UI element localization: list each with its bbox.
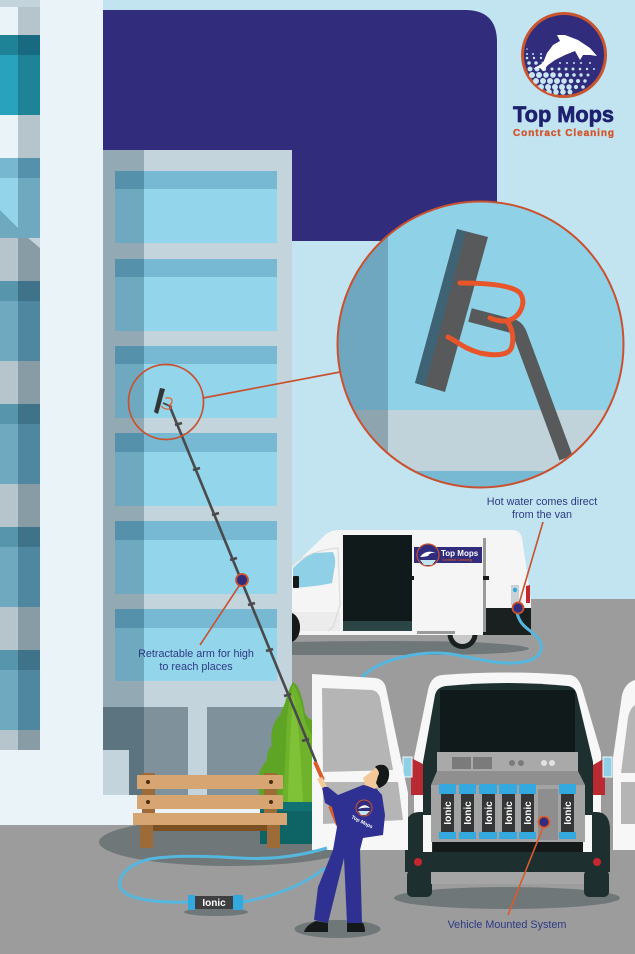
logo wordmark: Top Mops [513,102,614,127]
navy backdrop block [103,10,497,241]
telescopic pole [170,407,338,825]
operator figure [304,765,389,932]
open right van door [613,680,635,850]
label: retractable arm: to reach places [159,661,233,673]
ionic cylinder 1: Ionic [443,801,454,825]
van signage: Top Mops [441,549,479,558]
ionic cylinder 2 [459,784,476,839]
label: vehicle mounted system: Vehicle Mounted System [448,919,566,931]
potted tree [258,682,312,844]
ionic filter: Ionic [202,898,226,909]
side van shadow [292,641,529,655]
Top Mops logo [513,14,614,139]
ionic cylinder 6 [559,784,576,839]
label: hot water: Hot water comes direct [487,496,597,508]
ionic cylinder 3: Ionic [484,801,495,825]
ionic cylinder 1 [439,784,456,839]
ionic cylinder 6: Ionic [563,801,574,825]
left building [0,0,129,825]
open left van door [312,674,408,850]
logo roundel [522,14,606,96]
bench and tree shadow [99,825,333,866]
magnified squeegee circle [330,195,630,495]
van signage: Contract Cleaning [442,558,472,562]
central building [103,150,292,825]
bench [133,773,287,848]
callout: retractable arm [138,574,254,673]
filter shadow [184,908,248,916]
label: retractable arm: Retractable arm for high [138,648,254,660]
ionic cylinder 5: Ionic [523,801,534,825]
small squeegee head [154,388,172,414]
ionic cylinder 2: Ionic [463,801,474,825]
rear van shadow [394,887,620,909]
label: hot water: from the van [512,509,572,521]
small zoom circle and connector [128,364,340,440]
ionic cylinder 4: Ionic [504,801,515,825]
vehicle mounted system unit [431,752,585,842]
dolphin [533,35,597,71]
ground [0,599,635,954]
side-view van [292,530,531,649]
ionic filter [188,895,243,910]
callout: vehicle mounted system [448,816,566,931]
back logo on overalls [350,800,374,830]
water hose from side van to rear van [362,613,541,677]
ionic cylinder 3 [479,784,497,839]
rear-view van [403,672,612,897]
callout: hot water [487,496,597,614]
back logo on overalls: Top Mops [350,814,374,830]
floor hose and filter [120,848,327,916]
logo strapline: Contract Cleaning [513,128,614,139]
ionic cylinder 4 [499,784,517,839]
ionic cylinder 5 [519,784,536,839]
operator shadow [294,920,380,938]
van signage [414,544,482,566]
